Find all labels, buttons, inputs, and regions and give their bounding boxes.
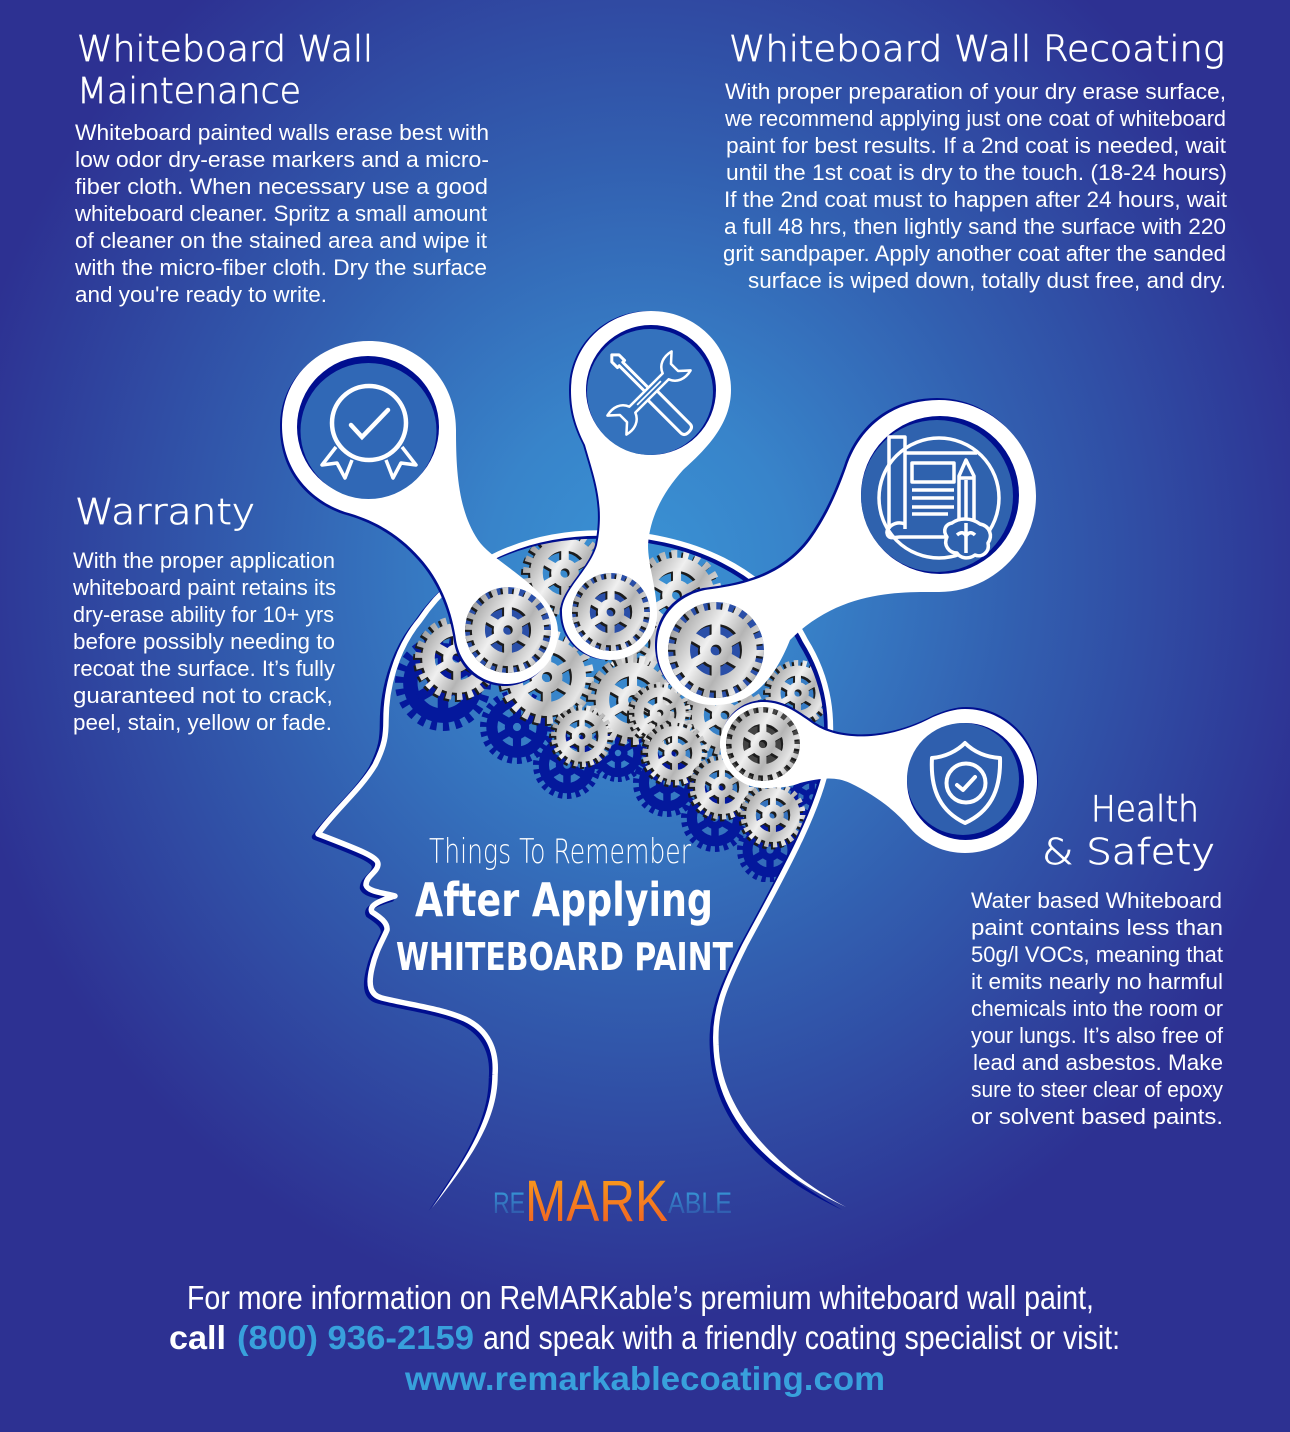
heading: whiteboard wall maintenance: Maintenance [77, 71, 301, 112]
text block: health: it emits nearly no harmful [971, 969, 1223, 994]
text block: health: Water based Whiteboard [971, 888, 1222, 913]
connector shapes [280, 311, 1038, 853]
lens gear 3 [668, 602, 764, 698]
icon: tools [586, 325, 716, 455]
heading: warranty: Warranty [75, 492, 255, 533]
icon: warranty rosette [297, 356, 439, 499]
heading: health and safety [1042, 789, 1215, 873]
text block: warranty: dry-erase ability for 10+ yrs [73, 602, 334, 627]
text block: health: your lungs. It’s also free of [971, 1023, 1224, 1048]
text block: recoating: If the 2nd coat must to happen after 24 hours, wait [724, 187, 1227, 212]
text block: maintenance: Whiteboard painted walls erase best with [75, 120, 489, 145]
center title: After Applying [415, 873, 713, 927]
text block: recoating: paint for best results. If a 2nd coat is needed, wait [726, 133, 1226, 158]
text block: maintenance [74, 120, 489, 307]
text block: warranty: recoat the surface. It’s fully [73, 656, 335, 681]
text block: maintenance: fiber cloth. When necessary use a good [75, 174, 488, 199]
text block: health: lead and asbestos. Make [973, 1050, 1223, 1075]
text block: warranty [72, 548, 336, 735]
center title: WHITEBOARD PAINT [396, 935, 733, 979]
lens gear 4 [726, 707, 800, 781]
heading: recoating: Whiteboard Wall Recoating [729, 29, 1225, 70]
text block: maintenance: whiteboard cleaner. Spritz a small amount [74, 201, 487, 226]
text block: warranty: before possibly needing to [73, 629, 335, 654]
logo: ABLE [668, 1187, 732, 1220]
heading: health and safety: Health [1091, 789, 1199, 830]
logo: MARK [525, 1169, 668, 1234]
text block: maintenance: with the micro-fiber cloth. Dry the surface [74, 255, 487, 280]
text block: health: sure to steer clear of epoxy [971, 1077, 1223, 1102]
text block: recoating: a full 48 hrs, then lightly sand the surface with 220 [724, 214, 1226, 239]
gears inside head [400, 535, 835, 880]
center title [396, 832, 733, 979]
footer call to action: For more information on ReMARKable’s premium whiteboard wall paint, [187, 1279, 1094, 1316]
head outline [314, 533, 846, 1211]
heading: whiteboard wall maintenance [77, 29, 373, 112]
text block: recoating: With proper preparation of your dry erase surface, [725, 79, 1226, 104]
text block: recoating: surface is wiped down, totally dust free, and dry. [748, 268, 1226, 293]
text block: recoating: we recommend applying just one coat of whiteboard [724, 106, 1226, 131]
text block: warranty: With the proper application [73, 548, 335, 573]
icon: plans pencil brain [861, 416, 1019, 574]
footer call to action: and speak with a friendly coating specialist or visit: [483, 1319, 1120, 1356]
icon: shield [907, 723, 1024, 840]
heading: health and safety: & Safety [1042, 832, 1215, 873]
text block: maintenance: low odor dry-erase markers and a micro- [75, 147, 489, 172]
footer call to action [169, 1279, 1120, 1397]
text block: recoating: grit sandpaper. Apply another coat after the sanded [723, 241, 1226, 266]
footer call to action: www.remarkablecoating.com [404, 1360, 885, 1397]
lens gear 1 [465, 587, 551, 673]
text block: health: paint contains less than [971, 915, 1223, 940]
text block: health [971, 888, 1224, 1129]
text block: warranty: peel, stain, yellow or fade. [73, 710, 332, 735]
text block: recoating [723, 79, 1227, 293]
center title: Things To Remember [429, 832, 691, 872]
text block: maintenance: of cleaner on the stained area and wipe it [75, 228, 487, 253]
text block: maintenance: and you're ready to write. [75, 282, 327, 307]
text block: health: chemicals into the room or [971, 996, 1223, 1021]
text block: warranty: guaranteed not to crack, [73, 683, 333, 708]
logo: RE [493, 1187, 525, 1220]
footer call to action: (800) 936-2159 [237, 1319, 474, 1356]
text block: warranty: whiteboard paint retains its [72, 575, 336, 600]
lens gear 2 [572, 573, 650, 651]
text block: recoating: until the 1st coat is dry to the touch. (18-24 hours) [726, 160, 1227, 185]
heading: whiteboard wall maintenance: Whiteboard Wall [77, 29, 373, 70]
footer call to action: call [169, 1319, 226, 1356]
text block: health: 50g/l VOCs, meaning that [971, 942, 1223, 967]
text block: health: or solvent based paints. [971, 1104, 1223, 1129]
